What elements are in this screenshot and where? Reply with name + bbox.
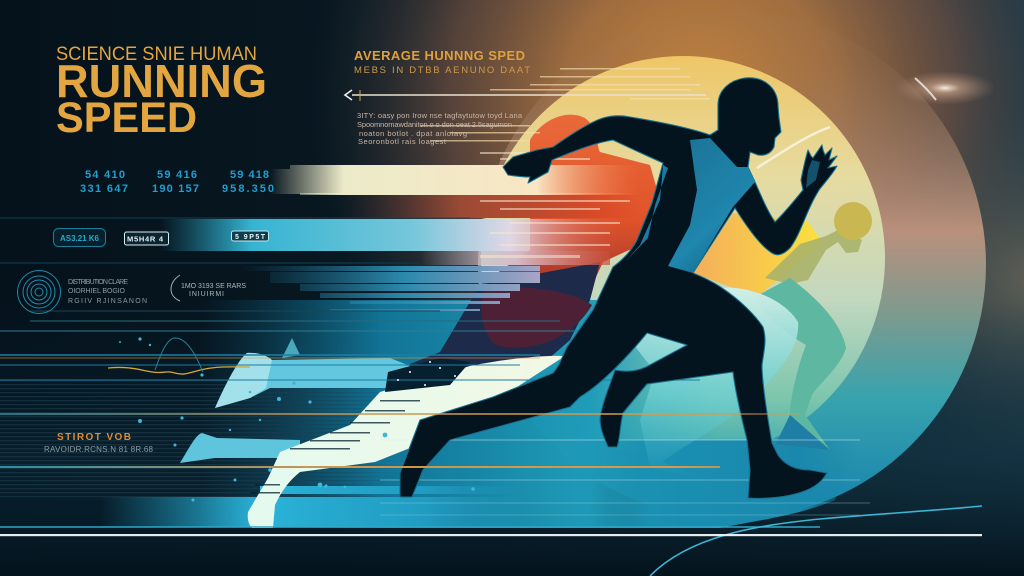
heading: average running speed: MEBS IN DTBB AENUNO DAAT bbox=[354, 65, 530, 76]
arrow line bbox=[345, 90, 706, 101]
badge: white bbox=[124, 232, 168, 245]
bottom cyan curve bbox=[650, 506, 982, 576]
speckle particles bbox=[119, 337, 475, 502]
stat numbers: 331 647 bbox=[80, 183, 128, 195]
horizontal track lines bbox=[0, 218, 870, 527]
foot: dark speckled bbox=[385, 358, 470, 392]
scanlines bbox=[0, 380, 400, 500]
ghost runner: green and yellow bbox=[693, 202, 872, 450]
arc and caption bbox=[171, 275, 246, 301]
leg: dissolving streak edge bbox=[250, 400, 420, 494]
heading: average running speed: AVERAGE HUNNNG SPED bbox=[354, 48, 525, 63]
arc and caption: 1MO 3193 SE RARS bbox=[181, 283, 246, 290]
lens flare bbox=[895, 71, 995, 105]
main runner silhouette bbox=[400, 78, 837, 498]
stat numbers: 190 157 bbox=[152, 183, 199, 195]
title bbox=[56, 44, 267, 142]
ghost runner: pale teal legs bbox=[630, 287, 798, 478]
streak: blue bbox=[240, 266, 540, 311]
floor glow bbox=[560, 440, 860, 528]
heading: average running speed bbox=[354, 48, 530, 76]
badge: teal: AS3.21 K6 bbox=[60, 234, 100, 243]
streak: cream bbox=[270, 165, 640, 195]
description text: 3ITY: oasy pon Irow nse tagfaytutow toyd Lana bbox=[357, 111, 523, 120]
description text bbox=[357, 111, 523, 146]
runner: shirt side bbox=[625, 165, 668, 262]
description text: Seoronbotl rais loagest bbox=[358, 137, 447, 146]
stat numbers: 59 416 bbox=[157, 169, 197, 181]
stat numbers: 59 418 bbox=[230, 169, 269, 181]
runner: shirt bbox=[668, 138, 755, 273]
orange track lines over runner bbox=[0, 414, 800, 467]
foot: pale blue upper bbox=[215, 353, 420, 408]
badges bbox=[54, 228, 268, 246]
streak: bottom cyan bbox=[100, 486, 560, 527]
text block: bottom left: RAVOIDR.RCNS.N 81 8R.68 bbox=[44, 445, 154, 454]
text block: bottom left bbox=[44, 432, 154, 454]
stat numbers: 54 410 bbox=[85, 169, 125, 181]
title: SCIENCE SNIE HUMAN bbox=[56, 44, 257, 65]
speed streak bands bbox=[0, 68, 710, 527]
description text: noaton botlot . dpat anlotavg bbox=[359, 129, 467, 138]
motion-blur legs on the left bbox=[180, 338, 565, 528]
runner: forearm highlight bbox=[806, 160, 820, 188]
chart: yellow wave line and peak bbox=[108, 338, 250, 374]
arc and caption: INIUIRMI bbox=[189, 291, 224, 298]
streak: cyan bbox=[160, 219, 620, 251]
badge: teal bbox=[54, 228, 106, 246]
outer circle bbox=[478, 11, 986, 519]
runner: body bbox=[400, 78, 837, 498]
title: RUNNING bbox=[56, 55, 267, 107]
description text: Spoomnomawdaniton o o don oeat 2.5sagumon bbox=[357, 120, 512, 129]
text block: icon caption: OIORHIEL BOGIO bbox=[68, 288, 126, 295]
badge: white: M5H4R 4 bbox=[127, 234, 164, 244]
icon: spiral target bbox=[18, 270, 60, 314]
leg: cream stride bbox=[248, 356, 565, 528]
inner sun circle bbox=[481, 56, 885, 460]
badge: small bbox=[232, 231, 268, 241]
text block: bottom left: STIROT VOB bbox=[57, 432, 131, 443]
white swoosh bbox=[757, 127, 830, 168]
stat numbers: 958.350 bbox=[222, 183, 274, 195]
lower teal motion field bbox=[200, 300, 720, 528]
streak: upper warm lines bbox=[420, 68, 710, 142]
badge: small: 5 9P5T bbox=[235, 234, 266, 241]
white baseline bbox=[0, 534, 982, 536]
streak: warm shadow lines bbox=[480, 152, 630, 258]
text block: icon caption: DISTRIBUTION CLARE bbox=[68, 279, 128, 286]
streak: orange red bbox=[340, 195, 640, 218]
title: SPEED bbox=[56, 94, 197, 142]
stat numbers bbox=[80, 169, 274, 195]
text block: icon caption: RGIIV RJINSANON bbox=[68, 298, 147, 305]
ghost runner: red bbox=[390, 115, 660, 395]
text block: icon caption bbox=[68, 279, 147, 305]
streak: lilac bbox=[420, 251, 610, 265]
foot: pale blue lower bbox=[180, 433, 300, 463]
